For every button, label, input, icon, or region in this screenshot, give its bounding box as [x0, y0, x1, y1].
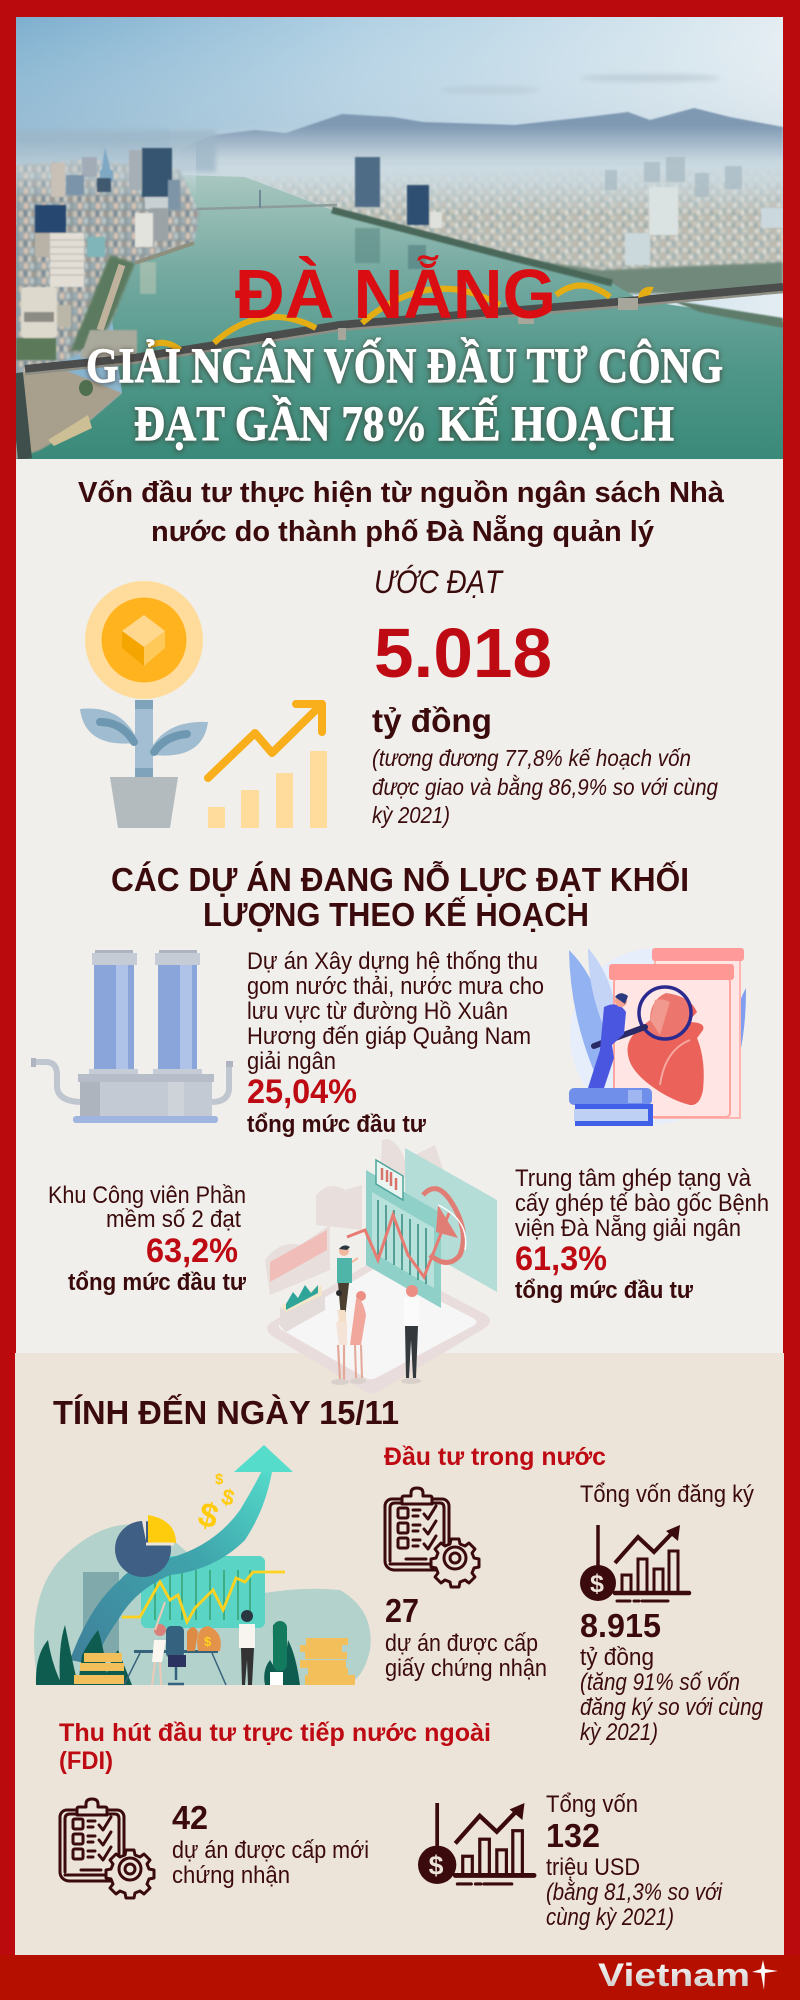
intro heading: [78, 477, 725, 548]
stat: 27 projects: [385, 1592, 547, 1682]
icon: FDI dollar coin and bars: $: [429, 1850, 444, 1880]
stat: 132 million USD: cùng kỳ 2021): [546, 1904, 674, 1931]
heading: as of 15/11: TÍNH ĐẾN NGÀY 15/11: [53, 1394, 399, 1431]
stat: estimated disbursement: tỷ đồng: [372, 702, 492, 739]
stat: estimated disbursement: 5.018: [374, 614, 552, 692]
text: organ transplant centre: tổng mức đầu tư: [515, 1277, 694, 1304]
intro heading: nước do thành phố Đà Nẵng quản lý: [151, 514, 654, 548]
text: organ transplant centre: [515, 1165, 769, 1304]
heading: projects: [111, 860, 689, 933]
heading: FDI: (FDI): [59, 1747, 113, 1775]
stat: 8.915 billion dong: đăng ký so với cùng: [580, 1694, 764, 1721]
stat: 8.915 billion dong: (tăng 91% số vốn: [580, 1669, 740, 1696]
illustration: investment growth team: $: [204, 1634, 212, 1649]
illustration: investment growth team: $: [194, 1495, 222, 1537]
stat: 8.915 billion dong: kỳ 2021): [580, 1719, 658, 1746]
stat: 132 million USD: 132: [546, 1817, 600, 1854]
stat: 132 million USD: Tổng vốn: [546, 1791, 638, 1818]
text: drainage project: tổng mức đầu tư: [247, 1111, 427, 1138]
illustration: investment growth team: $: [215, 1471, 224, 1488]
illustration: isometric data dashboard with people: [265, 1139, 497, 1394]
stat: estimated disbursement: ƯỚC ĐẠT: [374, 564, 504, 600]
title: ĐÀ NẴNG: ĐÀ NẴNG: [235, 254, 556, 333]
icon: dollar coin and rising bars: $: [590, 1570, 604, 1598]
panel: beige statistics section: [15, 1353, 784, 1955]
text: organ transplant centre: Trung tâm ghép tạng và: [515, 1165, 752, 1192]
stat: estimated disbursement: kỳ 2021): [372, 802, 450, 828]
panel: light content area: [16, 459, 783, 1359]
icon: FDI checklist with gear: [60, 1799, 154, 1898]
stat: 132 million USD: triệu USD: [546, 1854, 640, 1881]
text: drainage project: [247, 948, 544, 1138]
logo: Vietnam+: Vietnam: [598, 1957, 750, 1993]
stat: 42 new projects: 42: [172, 1799, 208, 1836]
icon: dollar coin and rising bars: [580, 1525, 689, 1601]
text: drainage project: Dự án Xây dựng hệ thống thu: [247, 948, 538, 975]
icon: growing coin plant with rising chart: [80, 581, 327, 828]
icon: heart under magnifier: [569, 948, 746, 1126]
illustration: investment growth team: [34, 1445, 371, 1685]
text: software park: 63,2%: [146, 1232, 238, 1270]
heading: FDI: Thu hút đầu tư trực tiếp nước ngoài: [59, 1719, 491, 1747]
text: software park: Khu Công viên Phần: [48, 1182, 246, 1209]
icon: FDI dollar coin and bars: [418, 1803, 534, 1884]
stat: 132 million USD: (bằng 81,3% so với: [546, 1879, 723, 1906]
logo: Vietnam+: [598, 1957, 778, 1993]
text: software park: [48, 1182, 247, 1296]
hero photo: Da Nang river and Dragon Bridge: [16, 17, 783, 459]
heading: projects: CÁC DỰ ÁN ĐANG NỖ LỰC ĐẠT KHỐI: [111, 860, 689, 898]
stat: 42 new projects: dự án được cấp mới: [172, 1837, 369, 1864]
text: organ transplant centre: cấy ghép tế bào gốc Bệnh: [515, 1190, 769, 1217]
heading: projects: LƯỢNG THEO KẾ HOẠCH: [203, 896, 589, 933]
stat: 132 million USD: [546, 1791, 723, 1931]
stat: 8.915 billion dong: [580, 1607, 764, 1746]
stat: 8.915 billion dong: tỷ đồng: [580, 1644, 654, 1671]
heading: domestic investment: Đầu tư trong nước: [384, 1443, 606, 1471]
stat: estimated disbursement: [372, 564, 718, 828]
stat: estimated disbursement: (tương đương 77,8% kế hoạch vốn: [372, 745, 691, 771]
intro heading: Vốn đầu tư thực hiện từ nguồn ngân sách Nhà: [78, 477, 725, 509]
text: organ transplant centre: viện Đà Nẵng giải ngân: [515, 1214, 741, 1242]
text: drainage project: Hương đến giáp Quảng Nam: [247, 1023, 531, 1050]
label: total registered capital: Tổng vốn đăng ký: [580, 1481, 754, 1508]
stat: 42 new projects: [172, 1799, 369, 1889]
illustration: investment growth team: $: [219, 1484, 237, 1511]
text: drainage project: 25,04%: [247, 1073, 357, 1111]
footer band: [0, 1955, 800, 2000]
text: software park: mềm số 2 đạt: [106, 1206, 241, 1233]
heading: FDI: [59, 1719, 491, 1775]
text: drainage project: lưu vực từ đường Hồ Xuân: [247, 998, 508, 1025]
stat: 8.915 billion dong: 8.915: [580, 1607, 661, 1644]
icon: water treatment tanks: [31, 950, 233, 1123]
icon: checklist with gear: [385, 1488, 479, 1587]
title line 3: ĐẠT GẦN 78% KẾ HOẠCH: [134, 394, 674, 451]
stat: 42 new projects: chứng nhận: [172, 1862, 290, 1889]
stat: 27 projects: giấy chứng nhận: [385, 1655, 547, 1682]
text: organ transplant centre: 61,3%: [515, 1240, 607, 1278]
text: drainage project: giải ngân: [247, 1048, 336, 1075]
stat: 27 projects: dự án được cấp: [385, 1630, 538, 1657]
stat: estimated disbursement: được giao và bằng 86,9% so với cùng: [372, 774, 718, 800]
text: software park: tổng mức đầu tư: [68, 1269, 247, 1296]
text: drainage project: gom nước thải, nước mưa cho: [247, 973, 544, 1000]
stat: 27 projects: 27: [385, 1592, 419, 1629]
